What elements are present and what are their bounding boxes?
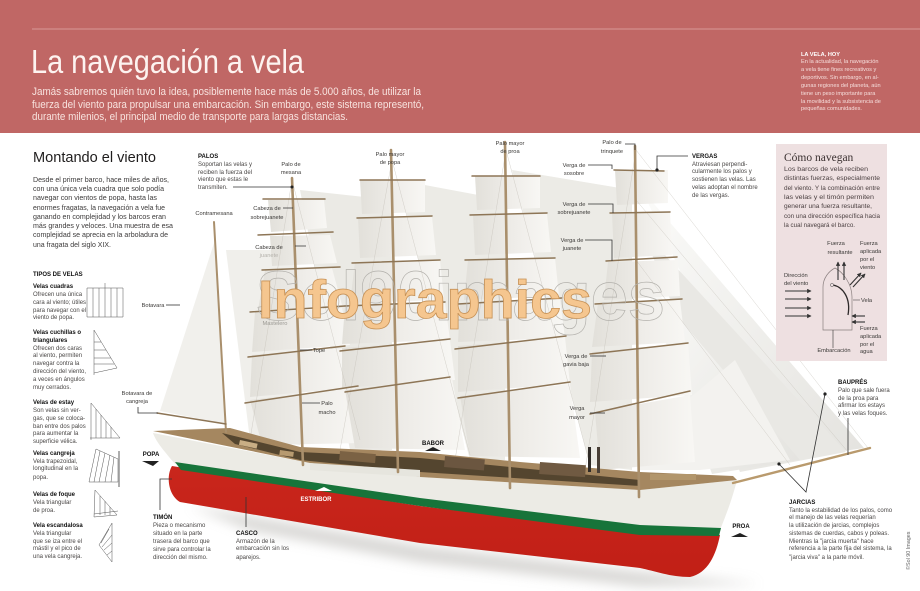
sail type: estay: ban entre dos palos: [33, 424, 86, 430]
hull green stripe: [175, 462, 721, 536]
callout: timón: sirve para controlar la: [153, 547, 211, 553]
callout: jarcias: el manejo de las velas requerían: [789, 515, 876, 521]
callout: vergas: Atraviesan perpendi-: [692, 162, 747, 168]
sail type: cuchillas o triangulares: a veces en ángulos: [33, 377, 85, 383]
sail type: escandalosa: [33, 523, 112, 562]
mast and part labels: Palo de: [602, 140, 622, 146]
callout: bauprés: [838, 378, 890, 455]
yard labels: Verga de: [563, 202, 585, 208]
forces diagram: agua: [860, 349, 873, 355]
mast and part labels: trinquete: [601, 149, 623, 155]
callout: vergas: cularmente los palos y: [692, 169, 752, 175]
callout: bauprés: BAUPRÉS: [838, 378, 867, 386]
callout: bauprés: Palo que sale fuera: [838, 388, 890, 394]
callout: bauprés: de la proa para: [838, 396, 879, 402]
callout: jarcias: [777, 392, 893, 561]
label: estribor: [300, 487, 332, 503]
mast and part labels: Mastelero: [263, 321, 287, 327]
label: estribor: ESTRIBOR: [300, 497, 332, 503]
sail type: cuadras: viento de popa.: [33, 315, 74, 321]
callout: timón: Pieza o mecanismo: [153, 523, 206, 529]
forces diagram: viento: [860, 265, 875, 271]
panel body text: con una dirección específica hacia: [784, 213, 880, 220]
yard labels: juanete: [562, 246, 581, 252]
sidebar: la vela, hoy: a vela tiene fines recreativos y: [801, 67, 876, 73]
sail type: estay: gas, que se coloca-: [33, 416, 85, 422]
hull white topsides: [153, 433, 737, 530]
callout: vergas: sostienen las velas. Las: [692, 177, 756, 183]
sail type: cuadras: para navegar con el: [33, 308, 86, 314]
callout: jarcias: Tanto la estabilidad de los palos, como: [789, 508, 893, 514]
sidebar: la vela, hoy: pequeñas comunidades.: [801, 106, 862, 112]
section body text: una fragata del siglo XIX.: [33, 240, 111, 249]
sail type: cuchillas o triangulares: Ofrecen dos caras: [33, 346, 82, 352]
forces diagram: aplicada: [860, 249, 882, 255]
mast and part labels: Contramesana: [195, 211, 233, 217]
yards: [157, 170, 870, 483]
callout: jarcias: Mientras la "jarcia muerta" hace: [789, 539, 874, 545]
sail types heading: TIPOS DE VELAS: [33, 272, 83, 278]
sail type: estay: Son velas sin ver-: [33, 408, 81, 414]
callout: casco: Armazón de la: [236, 539, 275, 545]
sail type: foque: Vela triangular: [33, 500, 71, 506]
section body text: enormes fragatas, la navegación a vela fue: [33, 203, 165, 212]
panel body text: generar una fuerza resultante,: [784, 203, 872, 210]
label: babor: BABOR: [422, 441, 445, 447]
mast and part labels: Botavara: [142, 303, 165, 309]
sail type: cuadras: [33, 283, 123, 321]
section body text: [33, 175, 174, 249]
callout: jarcias: "jarcia viva" a la parte móvil.: [789, 555, 864, 561]
header band: [0, 0, 920, 133]
square sails: mizzen: [250, 200, 362, 445]
callout: palos: PALOS: [198, 154, 218, 160]
mast and part labels: Cabeza de: [253, 206, 281, 212]
sail type: cangreja: [33, 449, 119, 487]
sidebar: la vela, hoy: deportivos. Sin embargo, en al-: [801, 75, 879, 81]
sail type: cangreja: popa.: [33, 475, 48, 481]
mast and part labels: Tope: [313, 348, 325, 354]
section body text: Desde el primer barco, hace miles de años,: [33, 175, 169, 184]
sail type: cuchillas o triangulares: al viento, permiten: [33, 353, 82, 359]
mast and part labels: cangreja: [126, 399, 149, 405]
intro paragraph: fuerza del viento para propulsar una embarcación. Sin embargo, este sistema representó,: [32, 99, 424, 111]
callout: vergas: VERGAS: [692, 154, 717, 160]
forces diagram: del viento: [784, 281, 808, 287]
callout: jarcias: referencia a la parte fija del sistema, la: [789, 546, 892, 552]
callout: palos: viento que estas le: [198, 177, 249, 183]
callout: timón: dirección del mismo.: [153, 555, 208, 561]
square sails: main aft: [342, 180, 465, 450]
forces diagram: Dirección: [784, 273, 808, 279]
sail type: escandalosa: una vela cangreja.: [33, 554, 82, 560]
panel body text: distintas fuerzas, especialmente: [784, 175, 881, 182]
mast and part labels: de popa: [380, 160, 401, 166]
sail type: cuchillas o triangulares: muy cerrados.: [33, 385, 71, 391]
sail type: cuchillas o triangulares: dirección del viento,: [33, 369, 86, 375]
ground shadow: [190, 506, 760, 586]
sail type: cuadras: cara al viento; útiles: [33, 300, 86, 306]
rigging: [250, 150, 868, 470]
forces diagram: resultante: [828, 250, 852, 256]
label: babor: [422, 441, 445, 451]
sail type: escandalosa: Vela escandalosa: [33, 523, 83, 529]
callout: palos: reciben la fuerza del: [198, 170, 252, 176]
sail type: cangreja: Vela trapezoidal,: [33, 459, 78, 465]
forces diagram: [784, 241, 882, 355]
mast and part labels: Palo mayor: [376, 152, 404, 158]
forces diagram: aplicada: [860, 334, 882, 340]
forces diagram: por el: [860, 257, 874, 263]
mast and part labels: Palo mayor: [496, 141, 524, 147]
callout: timón: [153, 479, 211, 561]
sail type: foque: Velas de foque: [33, 492, 76, 498]
callout: jarcias: sistemas de cuerdas, cabos y poleas.: [789, 531, 889, 537]
mast and part labels: Palo de: [281, 162, 301, 168]
callout: timón: trasera del barco que: [153, 539, 210, 545]
label: proa: PROA: [732, 524, 750, 530]
yard labels: Verga de: [565, 354, 587, 360]
sail type: cuadras: Velas cuadras: [33, 284, 74, 290]
sail type: cuchillas o triangulares: triangulares: [33, 338, 68, 344]
forces diagram: Embarcación: [817, 348, 851, 354]
forces diagram: por el: [860, 342, 874, 348]
section body text: complejidad se aprecia en la arboladura de: [33, 230, 168, 239]
forces diagram: Fuerza: [860, 241, 879, 247]
sail type: cuchillas o triangulares: navegar contra la: [33, 361, 80, 367]
callout: vergas: [655, 154, 758, 199]
sidebar: la vela, hoy: la movilidad y la subsistencia de: [801, 99, 881, 105]
sail type: escandalosa: Vela triangular: [33, 531, 71, 537]
watermark: Infographics: [258, 270, 592, 330]
callout: jarcias: la utilización de jarcias, complejos: [789, 523, 879, 529]
hull red lower part: [169, 466, 720, 577]
panel heading: Cómo navegan: [784, 152, 854, 164]
yard labels: [558, 163, 613, 421]
mast and part labels: juanete: [259, 253, 278, 259]
callout: vergas: velas adoptan el nombre: [692, 185, 758, 191]
panel body text: del viento. Y la combinación entre: [784, 185, 881, 192]
sidebar: la vela, hoy: tiene un peso importante para: [801, 91, 876, 97]
yard labels: gavia baja: [563, 362, 590, 368]
watermark: Sol90images: [256, 257, 665, 335]
callout: jarcias: JARCIAS: [789, 500, 815, 506]
staysails and jibs: [160, 170, 864, 474]
label: popa: [142, 452, 160, 466]
section body text: navegar con vientos de popa, hasta las: [33, 193, 157, 202]
masts: [214, 142, 639, 497]
callout: casco: CASCO: [236, 531, 258, 537]
sail types panel: [33, 272, 123, 562]
sidebar: la vela, hoy: En la actualidad, la navegación: [801, 59, 878, 65]
sidebar: la vela, hoy: gunas regiones del planeta, aún: [801, 83, 881, 89]
forces diagram: Fuerza: [860, 326, 879, 332]
sail type: estay: superficie vélica.: [33, 439, 78, 445]
panel body text: Los barcos de vela reciben: [784, 166, 869, 173]
intro paragraph: [32, 86, 424, 123]
deck and superstructure: [153, 428, 737, 490]
square sails: main fore: [458, 176, 580, 458]
callout: palos: Soportan las velas y: [198, 162, 252, 168]
mast and part labels: [122, 140, 635, 416]
mast and part labels: macho: [318, 410, 336, 416]
panel body text: la cual navegará el barco.: [784, 222, 855, 229]
callout: casco: [236, 497, 289, 561]
callout: vergas: de las vergas.: [692, 193, 730, 199]
yard labels: mayor: [569, 415, 585, 421]
copyright credit: ©Sol 90 Images: [905, 531, 912, 570]
intro paragraph: Jamás sabremos quién tuvo la idea, posiblemente hace más de 5.000 años, de utilizar la: [32, 86, 422, 98]
section body text: ganando en complejidad y los barcos eran: [33, 212, 166, 221]
section body text: más grandes y veloces. Una muestra de esa: [33, 221, 174, 230]
sidebar: la vela, hoy: LA VELA, HOY: [801, 52, 840, 58]
yard labels: Verga: [570, 406, 585, 412]
mast and part labels: mesana: [281, 170, 302, 176]
callout: palos: transmiten.: [198, 185, 228, 191]
label: proa: [731, 524, 750, 537]
section heading: Montando el viento: Montando el viento: [33, 149, 156, 166]
intro paragraph: durante milenios, el principal medio de transporte para largas distancias.: [32, 111, 348, 123]
panel body text: [784, 166, 881, 229]
sidebar: la vela, hoy: [801, 52, 881, 112]
panel: cómo navegan: [776, 144, 887, 361]
sail type: foque: [33, 490, 118, 517]
sail type: estay: para aumentar la: [33, 431, 79, 437]
title: La navegación a vela: [31, 43, 305, 80]
mast and part labels: Botavara de: [122, 391, 152, 397]
illustration: sailing ship: [153, 142, 870, 586]
callout: timón: situado en la parte: [153, 531, 203, 537]
sail type: estay: Velas de estay: [33, 400, 75, 406]
callout: bauprés: y las velas foques.: [838, 411, 888, 417]
callout: casco: embarcación sin los: [236, 546, 289, 552]
mast and part labels: de proa: [500, 149, 520, 155]
yard labels: Verga de: [563, 163, 585, 169]
callout: casco: aparejos.: [236, 555, 261, 561]
sail type: cuadras: Ofrecen una única: [33, 292, 83, 298]
yard labels: sosobre: [564, 171, 584, 177]
square sails: foremast: [590, 170, 695, 470]
sail type: cuchillas o triangulares: Velas cuchillas o: [33, 330, 81, 336]
sail type: cangreja: longitudinal en la: [33, 466, 79, 472]
forces diagram: Vela: [861, 298, 873, 304]
section body text: con una única vela cuadra que solo podía: [33, 184, 165, 193]
callout: palos: [198, 154, 294, 191]
mast and part labels: Cabeza de: [255, 245, 283, 251]
forces diagram: Fuerza: [827, 241, 846, 247]
mast and part labels: sobrejuanete: [251, 215, 283, 221]
sail type: estay: [33, 400, 120, 445]
callout: timón: TIMÓN: [153, 513, 172, 521]
sail type: foque: de proa.: [33, 508, 55, 514]
sail type: cangreja: Velas cangreja: [33, 451, 75, 457]
label: popa: POPA: [143, 452, 160, 458]
yard labels: Verga de: [561, 238, 583, 244]
sail type: escandalosa: que se iza entre el: [33, 539, 82, 545]
sail type: cuchillas o triangulares: [33, 330, 117, 391]
panel body text: las velas y el timón permiten: [784, 194, 875, 201]
callout: bauprés: afirmar los estays: [838, 403, 885, 409]
sail type: escandalosa: mástil y el pico de: [33, 546, 81, 552]
mast and part labels: Palo: [321, 401, 333, 407]
yard labels: sobrejuanete: [558, 210, 590, 216]
